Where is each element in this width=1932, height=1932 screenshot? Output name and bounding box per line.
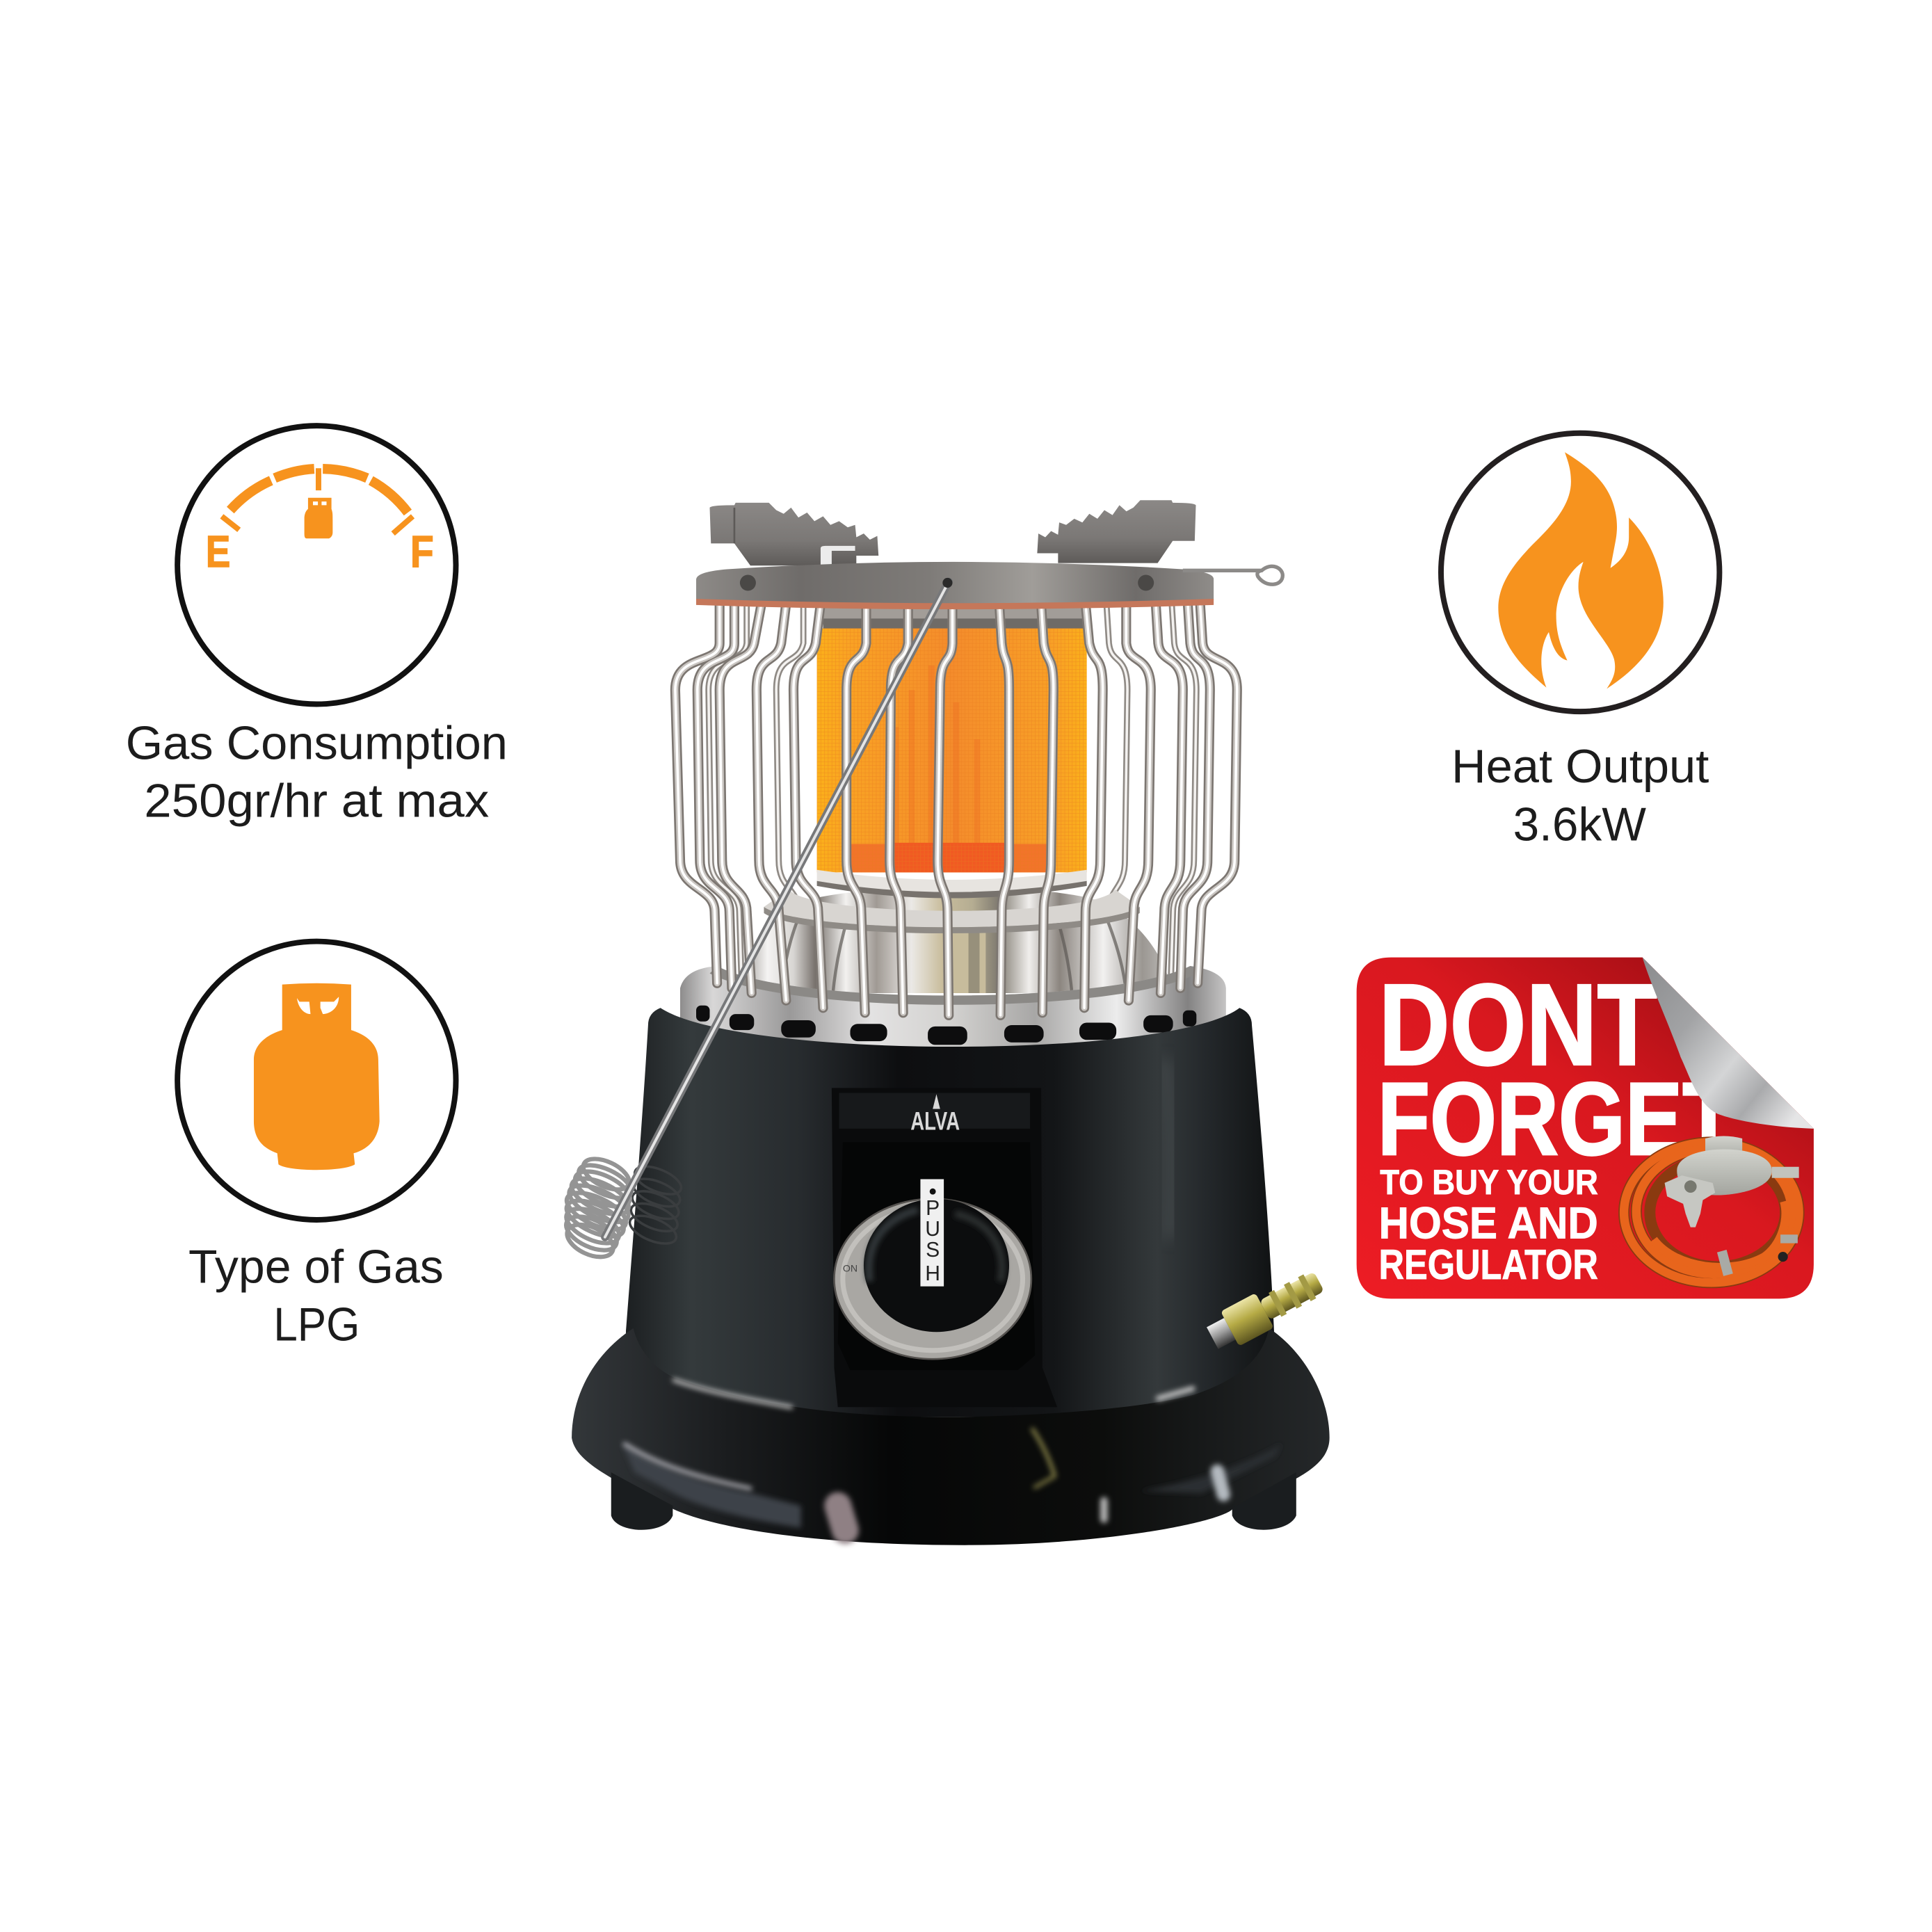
lower rim shading — [622, 1444, 801, 1528]
sticker text: FORGET — [1378, 1061, 1735, 1177]
knob label: PUSH: S — [926, 1239, 940, 1262]
regulator — [1705, 1136, 1742, 1162]
mini cylinder — [305, 498, 332, 538]
sticker text: HOSE AND — [1379, 1198, 1598, 1248]
heater body — [572, 1008, 1330, 1545]
logo: ALVA — [910, 1094, 960, 1136]
label: heat output — [1451, 741, 1709, 851]
sticker text: DONT — [1379, 960, 1657, 1090]
handle spring — [561, 1152, 636, 1264]
label: gas consumption: 250gr/hr at max — [144, 775, 489, 828]
panel: gas consumption — [126, 426, 508, 828]
label: type of gas: LPG — [273, 1299, 360, 1351]
burner mesh — [817, 606, 1087, 899]
control knob: ON — [843, 1263, 858, 1274]
label: gas consumption — [126, 717, 508, 828]
icon: fuel gauge: F — [410, 526, 434, 577]
panel: type of gas — [177, 942, 456, 1351]
handle spring shadow — [626, 1161, 685, 1249]
chrome collar with vents — [680, 966, 1226, 1056]
knob label: PUSH — [920, 1180, 944, 1287]
icon: fuel gauge — [177, 426, 456, 705]
label: type of gas — [188, 1241, 444, 1351]
heater dome reflector — [736, 887, 1173, 993]
gloss highlights — [625, 1380, 1223, 1530]
icon: LPG cylinder — [177, 942, 456, 1220]
sticker text: TO BUY YOUR — [1380, 1163, 1598, 1202]
label: heat output: 3.6kW — [1513, 798, 1646, 851]
knob label: PUSH: H — [925, 1262, 940, 1285]
gas inlet connector — [1203, 1264, 1328, 1355]
cage wires — [675, 604, 1237, 1015]
sticker text: REGULATOR — [1379, 1241, 1598, 1288]
sticker background — [1357, 958, 1814, 1298]
base feet — [611, 1472, 1296, 1530]
rear cage wires — [709, 604, 1196, 1006]
logo: ALVA: ALVA — [910, 1106, 960, 1136]
control knob — [834, 1180, 1031, 1359]
sticker corner peel — [1643, 958, 1814, 1129]
top ring and pot clamps — [696, 500, 1282, 609]
hose and regulator — [1624, 1136, 1799, 1282]
panel: heater product — [561, 500, 1330, 1545]
label: heat output: Heat Output — [1451, 741, 1709, 793]
label: type of gas: Type of Gas — [188, 1241, 444, 1293]
label: gas consumption: Gas Consumption — [126, 717, 508, 769]
icon: fuel gauge: E — [206, 526, 230, 577]
panel: don't forget sticker — [1357, 958, 1814, 1298]
panel: heat output — [1441, 433, 1719, 851]
control panel — [832, 1088, 1057, 1407]
knob label: PUSH: P — [926, 1197, 940, 1220]
sticker text — [1378, 960, 1735, 1288]
knob label: PUSH: U — [925, 1218, 940, 1241]
carrying handle rod — [605, 578, 953, 1237]
icon: flame — [1441, 433, 1719, 711]
